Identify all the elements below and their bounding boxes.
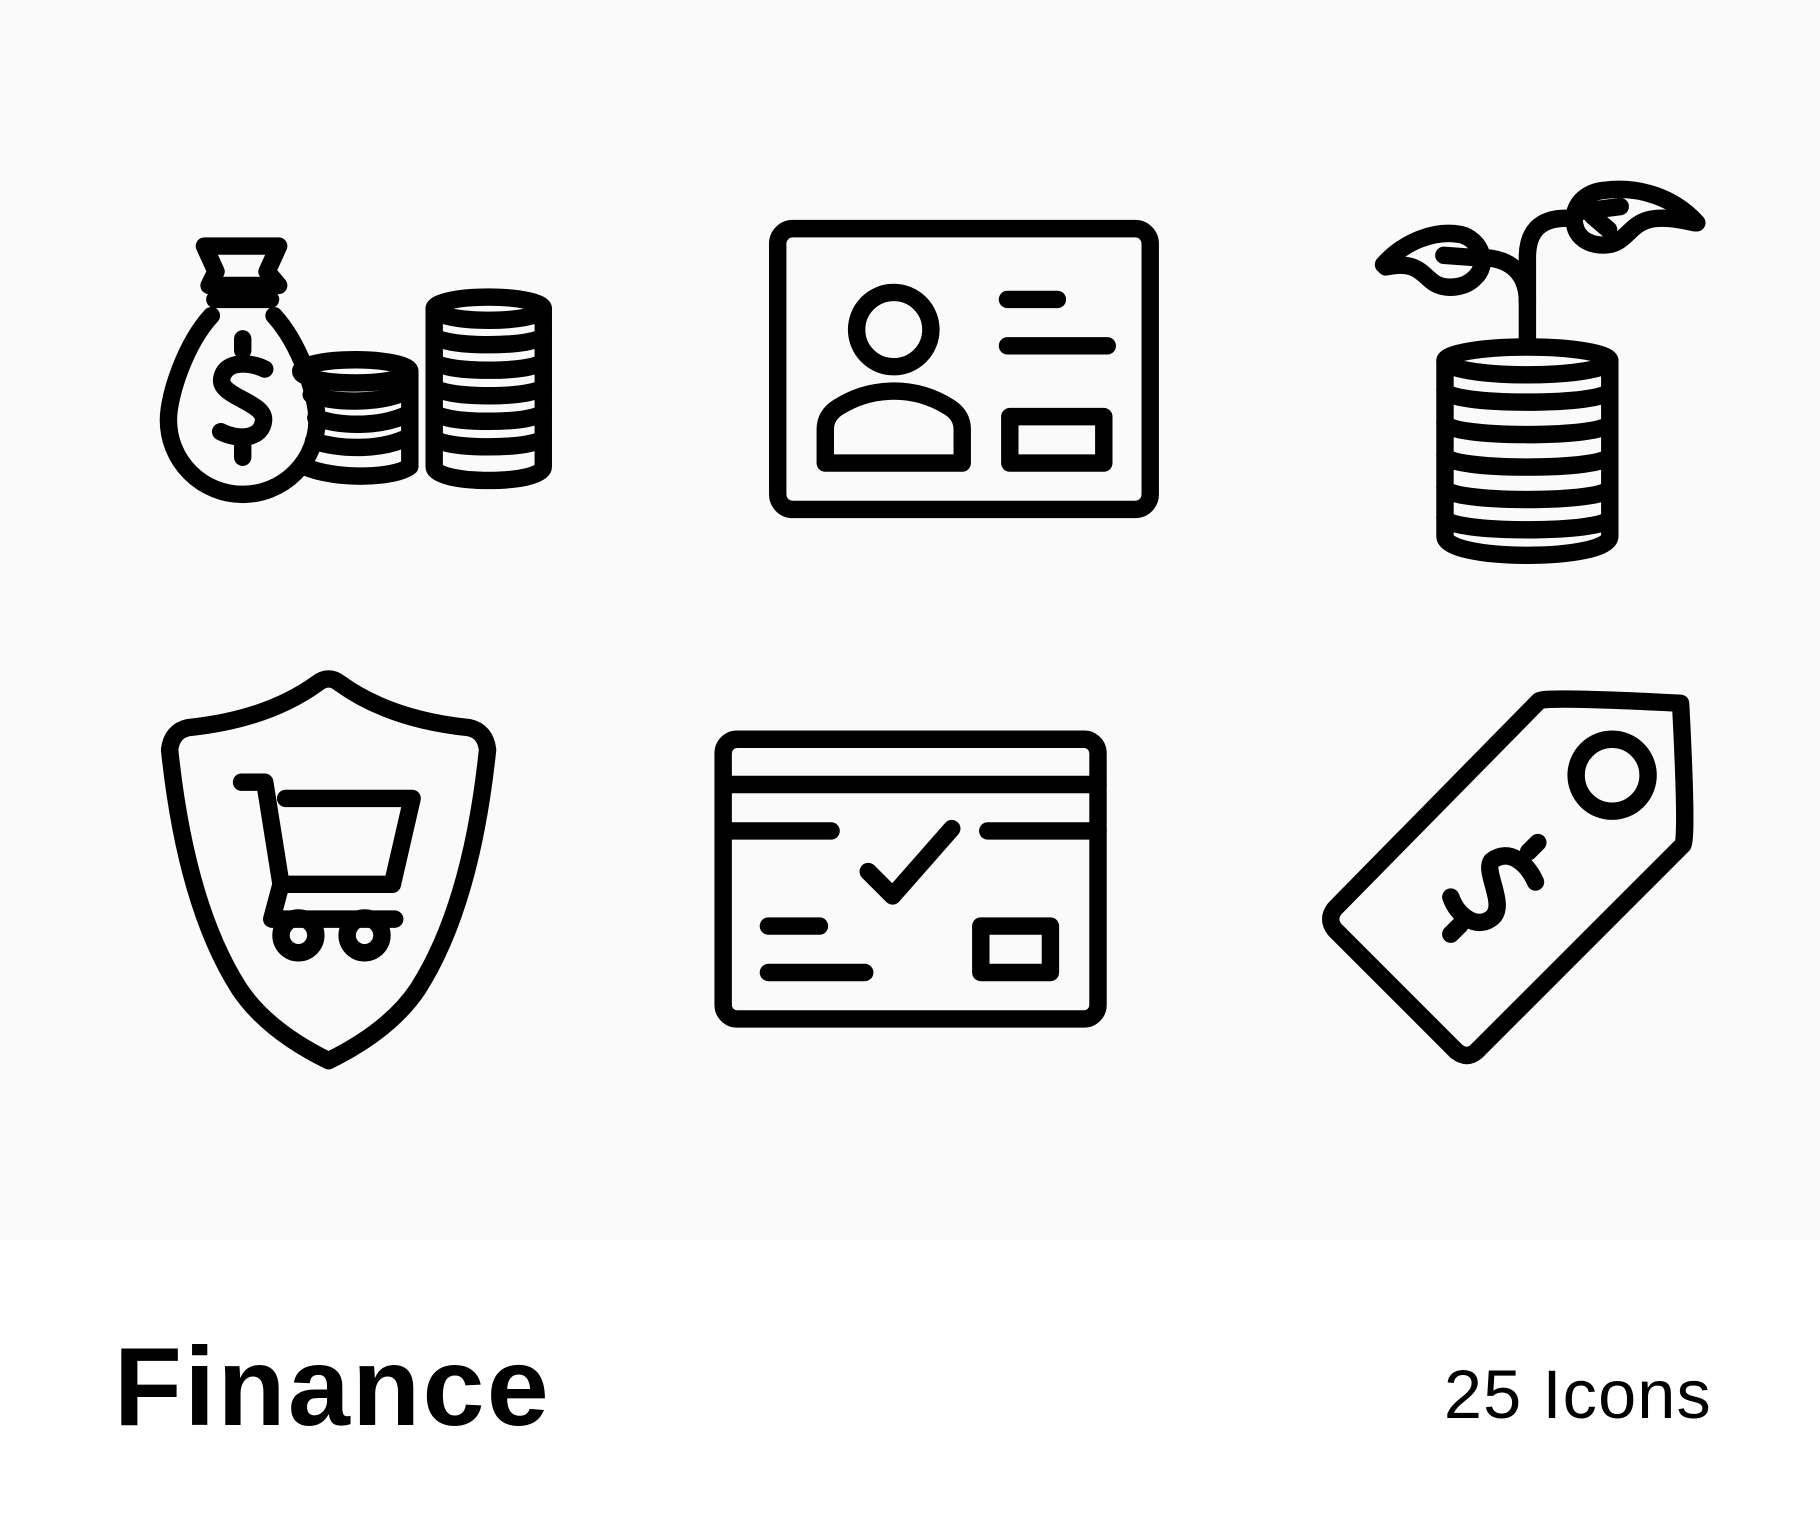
icon count: 25 Icons <box>1444 1356 1712 1433</box>
icon: price tag <box>1331 699 1685 1055</box>
icon: money bag and coins <box>168 246 543 494</box>
icon: id card <box>778 229 1150 509</box>
icon: coin stack with plant <box>1383 189 1697 555</box>
title: Finance <box>114 1324 551 1449</box>
icon: credit card with check <box>723 739 1098 1019</box>
icon: shield with shopping cart <box>170 679 488 1061</box>
